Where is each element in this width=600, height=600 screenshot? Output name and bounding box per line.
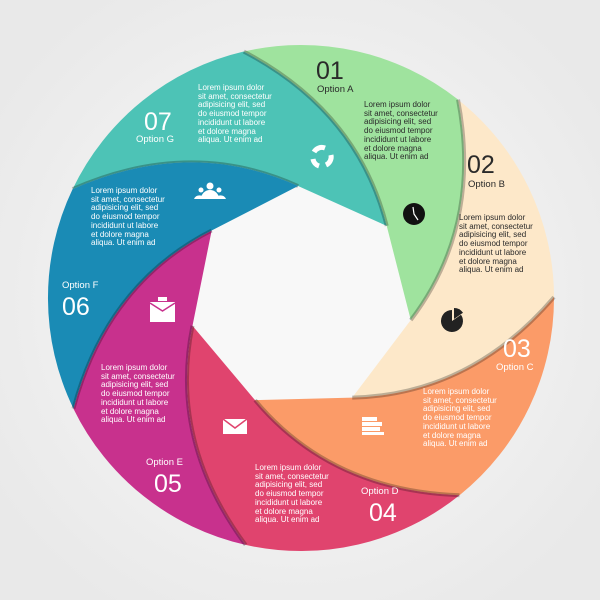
- text: Option C: [496, 362, 534, 373]
- text 07: incididunt ut labore: [198, 118, 265, 127]
- text 01: incididunt ut labore: [364, 135, 431, 144]
- text 04: aliqua. Ut enim ad: [255, 515, 319, 524]
- text: Option A: [317, 84, 353, 95]
- text 02: sit amet, consectetur: [459, 222, 533, 231]
- text 02: aliqua. Ut enim ad: [459, 265, 523, 274]
- label 07: 07: [144, 108, 172, 136]
- text 03: incididunt ut labore: [423, 422, 490, 431]
- text 03: et dolore magna: [423, 431, 481, 440]
- label 02: 02: [467, 151, 495, 179]
- text 04: do eiusmod tempor: [255, 489, 323, 498]
- label 04: Option D: [361, 486, 398, 497]
- text 04: sit amet, consectetur: [255, 472, 329, 481]
- icon: briefcase: [150, 297, 175, 322]
- blade 05 magenta: [39, 230, 289, 578]
- text: 04: [369, 499, 397, 527]
- text 02: Lorem ipsum dolor: [459, 213, 525, 222]
- label 01: 01: [316, 57, 344, 85]
- text 07: aliqua. Ut enim ad: [198, 135, 262, 144]
- text 07: [198, 83, 272, 144]
- text 01: sit amet, consectetur: [364, 109, 438, 118]
- label 05: Option E: [146, 457, 183, 468]
- text 01: Lorem ipsum dolor: [364, 100, 430, 109]
- icon: clock: [403, 203, 425, 225]
- text 03: aliqua. Ut enim ad: [423, 439, 487, 448]
- text 07: Lorem ipsum dolor: [198, 83, 264, 92]
- text 05: et dolore magna: [101, 407, 159, 416]
- inner heptagon: [171, 168, 431, 428]
- text 04: [255, 463, 329, 524]
- blade 03 orange: [255, 257, 600, 559]
- text 05: sit amet, consectetur: [101, 372, 175, 381]
- icon: books: [362, 417, 384, 435]
- text 01: aliqua. Ut enim ad: [364, 152, 428, 161]
- text 03: Lorem ipsum dolor: [423, 387, 489, 396]
- text 02: incididunt ut labore: [459, 248, 526, 257]
- text 06: do eiusmod tempor: [91, 212, 159, 221]
- blade 06 blue: [0, 79, 298, 436]
- text 03: sit amet, consectetur: [423, 396, 497, 405]
- icon: people: [194, 182, 226, 199]
- text 04: adipisicing elit, sed: [255, 480, 322, 489]
- text 02: adipisicing elit, sed: [459, 230, 526, 239]
- label 06: Option F: [62, 280, 98, 291]
- blade 02 cream: [352, 91, 588, 433]
- text 06: aliqua. Ut enim ad: [91, 238, 155, 247]
- text 04: incididunt ut labore: [255, 498, 322, 507]
- text 03: adipisicing elit, sed: [423, 404, 490, 413]
- text 06: adipisicing elit, sed: [91, 203, 158, 212]
- text: 05: [154, 470, 182, 498]
- text 04: Lorem ipsum dolor: [255, 463, 321, 472]
- text 06: Lorem ipsum dolor: [91, 186, 157, 195]
- text 06: [91, 186, 165, 247]
- text 07: do eiusmod tempor: [198, 109, 266, 118]
- text: 06: [62, 293, 90, 321]
- text 01: do eiusmod tempor: [364, 126, 432, 135]
- icon: envelope: [223, 419, 247, 434]
- text 05: [101, 363, 175, 424]
- text 01: adipisicing elit, sed: [364, 117, 431, 126]
- text 03: do eiusmod tempor: [423, 413, 491, 422]
- text 05: incididunt ut labore: [101, 398, 168, 407]
- text 07: adipisicing elit, sed: [198, 100, 265, 109]
- text 07: et dolore magna: [198, 127, 256, 136]
- text 06: sit amet, consectetur: [91, 195, 165, 204]
- text 05: do eiusmod tempor: [101, 389, 169, 398]
- icon: pie: [441, 308, 463, 332]
- blade 04 red: [119, 326, 478, 600]
- text 07: sit amet, consectetur: [198, 92, 272, 101]
- text 05: adipisicing elit, sed: [101, 380, 168, 389]
- text 02: et dolore magna: [459, 257, 517, 266]
- text 04: et dolore magna: [255, 507, 313, 516]
- text 02: do eiusmod tempor: [459, 239, 527, 248]
- text 05: Lorem ipsum dolor: [101, 363, 167, 372]
- icon: cycle: [313, 147, 331, 166]
- text: Option B: [468, 179, 505, 190]
- text 01: [364, 100, 438, 161]
- text 02: [459, 213, 533, 274]
- text 05: aliqua. Ut enim ad: [101, 415, 165, 424]
- text: Option G: [136, 134, 174, 145]
- text 06: et dolore magna: [91, 230, 149, 239]
- text 06: incididunt ut labore: [91, 221, 158, 230]
- blade 01 green: [209, 0, 547, 320]
- label 03: 03: [503, 335, 531, 363]
- text 03: [423, 387, 497, 448]
- text 01: et dolore magna: [364, 144, 422, 153]
- blade 07 teal: [69, 48, 387, 234]
